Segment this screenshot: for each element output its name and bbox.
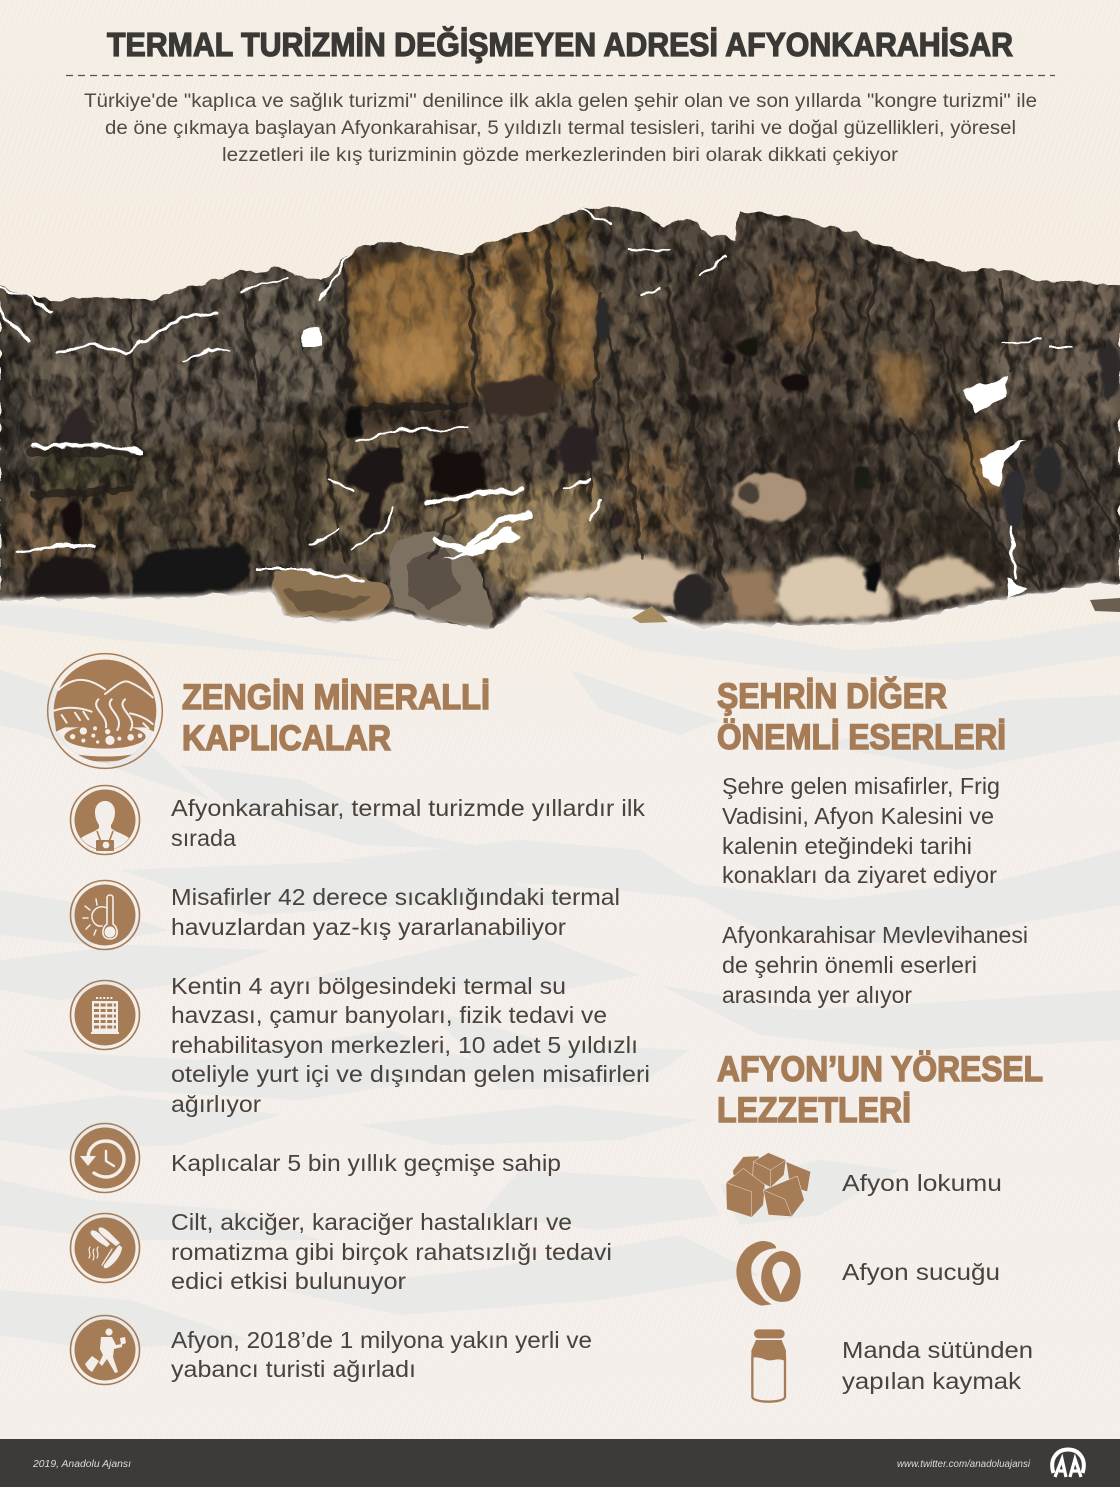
icon: traveller with suitcase [70,1316,140,1384]
heading: KAPLICALAR [182,719,391,758]
footer: twitter url: www.twitter.com/anadoluajansi [897,1458,1031,1470]
text: Afyonkarahisar, termal turizmde yıllardır ilk [171,795,646,821]
panel: mineral springs [47,654,650,1384]
text: romatizma gibi birçok rahatsızlığı tedavi [171,1239,612,1265]
heading [717,676,1006,757]
heading: AFYON’UN YÖRESEL [717,1050,1043,1089]
icon: jar of kaymak [751,1329,786,1402]
small stones on the snow [632,598,1120,623]
text: oteliyle yurt içi ve dışından gelen misafirleri [171,1061,650,1087]
text: Afyonkarahisar Mevlevihanesi [722,922,1028,948]
text: Şehre gelen misafirler, Frig [722,773,1000,799]
heading [717,1050,1043,1130]
panel: other landmarks [717,676,1028,1008]
icon: sucuk [736,1241,801,1306]
intro text: de öne çıkmaya başlayan Afyonkarahisar, 5 yıldızlı termal tesisleri, tarihi ve doğal güzellikleri, yöresel [105,118,1016,139]
text: yabancı turisti ağırladı [171,1356,416,1382]
caves and holes [25,298,1120,619]
photo: snowy rock-cut cliff [0,200,1120,640]
text: rehabilitasyon merkezleri, 10 adet 5 yıldızlı [171,1032,638,1058]
text: Afyon, 2018’de 1 milyona yakın yerli ve [171,1327,592,1353]
heading [182,678,490,758]
text [171,795,646,851]
heading: ZENGİN MİNERALLİ [182,678,490,717]
rock texture [0,200,1120,640]
text: havuzlardan yaz-kış yararlanabiliyor [171,914,566,940]
text: Kaplıcalar 5 bin yıllık geçmişe sahip [171,1150,561,1176]
text [842,1170,1033,1394]
intro text: Türkiye'de "kaplıca ve sağlık turizmi" denilince ilk akla gelen şehir olan ve son yıllarda "kongre turizmi" ile [84,91,1037,112]
text: sırada [171,825,236,851]
footer: copyright: 2019, Anadolu Ajansı [32,1458,131,1470]
cracks [30,218,1120,600]
text: ağırlıyor [171,1091,261,1117]
logo: AA [1052,1450,1084,1477]
background: snow streak pattern [0,600,1120,1350]
text: yapılan kaymak [842,1368,1022,1394]
text: edici etkisi bulunuyor [171,1268,406,1294]
pale undercut rock [525,555,995,620]
text: kalenin eteğindeki tarihi [722,833,972,859]
text: de şehrin önemli eserleri [722,952,977,978]
icon: hot spring [47,654,163,773]
heading: ŞEHRİN DİĞER [717,676,947,716]
warm sandstone panels [352,245,1006,580]
text: Cilt, akciğer, karaciğer hastalıkları ve [171,1209,572,1235]
text: konakları da ziyaret ediyor [722,862,997,888]
title: TERMAL TURİZMİN DEĞİŞMEYEN ADRESİ AFYONKARAHİSAR [107,26,1013,63]
footer [0,1439,1120,1487]
text: Vadisini, Afyon Kalesini ve [722,803,994,829]
text: Misafirler 42 derece sıcaklığındaki termal [171,884,620,910]
text: havzası, çamur banyoları, fizik tedavi ve [171,1002,607,1028]
text [171,973,650,1117]
boulders [272,531,493,631]
text: Afyon lokumu [842,1170,1002,1196]
icon: thermometer and sun [70,880,140,950]
text: arasında yer alıyor [722,982,912,1008]
text [171,1327,592,1382]
text: Kentin 4 ayrı bölgesindeki termal su [171,973,566,999]
heading: ÖNEMLİ ESERLERİ [717,718,1006,757]
text: Afyon sucuğu [842,1259,1000,1285]
icon: history clock [70,1124,140,1192]
soft base of the cliff [0,586,1120,632]
text: Manda sütünden [842,1337,1033,1363]
snow patches [0,210,1072,582]
text [722,773,1028,1008]
icon: Turkish delight cubes [726,1153,811,1217]
snow blocks [302,328,1120,606]
icon: aching joint [70,1214,140,1282]
icon: tourist with camera [70,786,140,854]
intro text: lezzetleri ile kış turizminin gözde merkezlerinden biri olarak dikkati çekiyor [222,145,899,166]
dark shadow bands on the slabs [352,240,1005,585]
icon: hotel [70,980,140,1050]
panel: local tastes [717,1050,1043,1402]
intro text [84,91,1037,166]
text [171,1209,612,1294]
heading: LEZZETLERİ [717,1091,911,1130]
text [171,884,620,940]
